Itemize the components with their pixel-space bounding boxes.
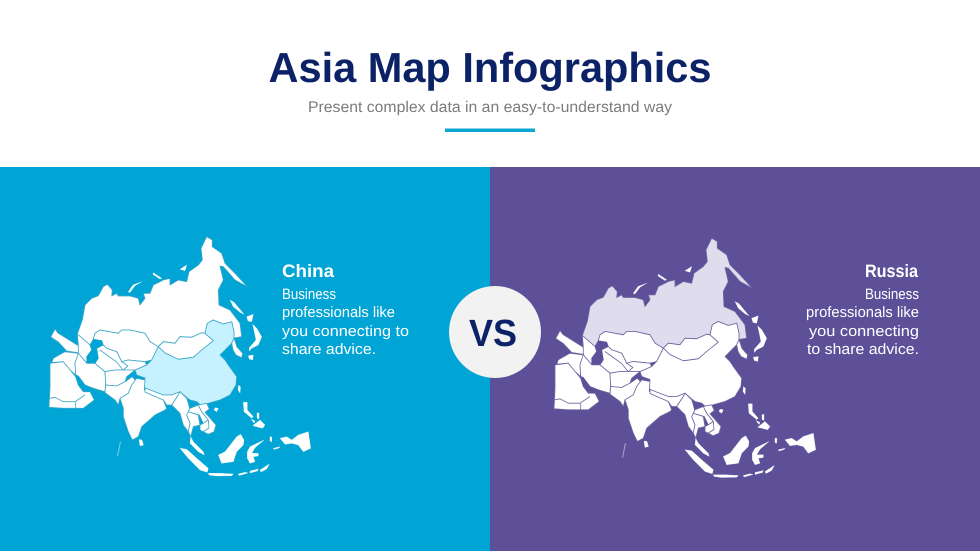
panel: Russia	[490, 167, 980, 551]
heading: Russia: Russia	[865, 261, 919, 281]
text block: China description: Business	[282, 286, 336, 303]
text block: China description: you connecting to	[282, 323, 409, 340]
text block: Russia description: to share advice.	[807, 341, 919, 358]
text block: China description: share advice.	[282, 341, 376, 358]
subtitle: Present complex data in an easy-to-understand way	[308, 99, 672, 116]
map: Asia with China highlighted	[49, 237, 311, 476]
text block: China description	[282, 286, 409, 358]
VS badge	[449, 286, 541, 378]
text block: Russia description	[806, 286, 919, 358]
text block: Russia description: Business	[865, 286, 919, 303]
map: Asia with Russia highlighted	[554, 238, 816, 478]
panel: China	[0, 167, 490, 551]
heading: China: China	[282, 261, 335, 281]
text block: Russia description: you connecting	[809, 323, 919, 340]
text block: China description: professionals like	[282, 304, 395, 321]
title: Asia Map Infographics	[268, 44, 712, 91]
text block: Russia description: professionals like	[806, 304, 919, 321]
title accent bar	[445, 128, 535, 132]
VS badge: VS	[469, 313, 517, 355]
